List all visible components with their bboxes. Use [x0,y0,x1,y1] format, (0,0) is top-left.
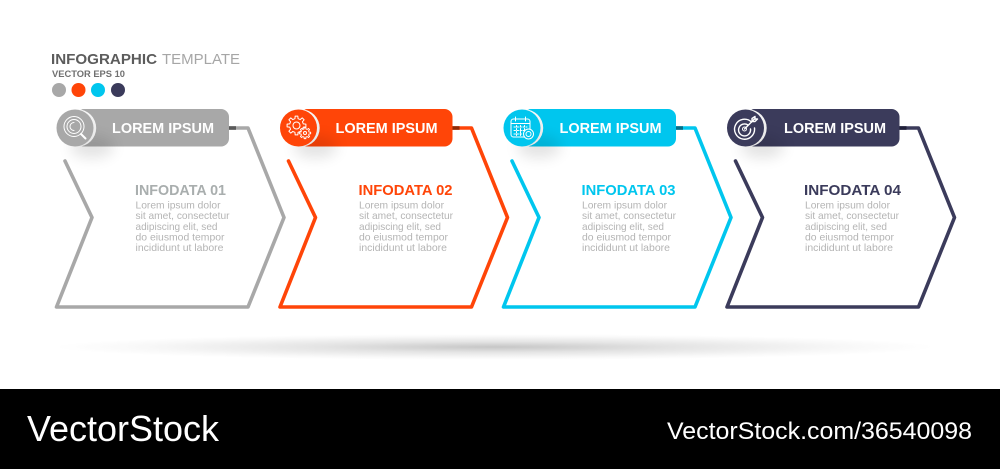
body text: do eiusmod tempor [582,232,671,244]
body text: incididunt ut labore [805,242,893,254]
step heading: INFODATA 03 [582,182,676,199]
body text [359,200,453,254]
icon shadow [740,136,784,158]
icon: target [735,116,758,139]
body text: incididunt ut labore [582,242,670,254]
pill text: LOREM IPSUM [336,121,438,137]
pill text: LOREM IPSUM [112,121,214,137]
body text: Lorem ipsum dolor [136,200,221,212]
body text: do eiusmod tempor [136,232,225,244]
icon disc [504,110,540,146]
panel: step 4 [727,109,954,307]
panel: step 3 [504,109,731,307]
icon ring [59,109,96,147]
icon ring [729,109,767,147]
body text: sit amet, consectetur [359,210,453,222]
icon shadow [294,136,338,158]
body text: incididunt ut labore [359,242,447,254]
body text: incididunt ut labore [136,242,224,254]
body text: Lorem ipsum dolor [805,200,890,212]
arrow outline [727,128,954,307]
icon disc [280,110,317,146]
subheading: VECTOR EPS 10 [52,69,125,80]
label pill [76,109,229,146]
body text: Lorem ipsum dolor [582,200,667,212]
footer band [0,389,1000,469]
body text: sit amet, consectetur [136,210,230,222]
icon disc [56,110,94,146]
label pill [746,109,900,146]
step heading: INFODATA 04 [804,182,902,199]
body text: adipiscing elit, sed [582,221,664,233]
step heading: INFODATA 02 [358,182,452,199]
colour dots [52,83,125,97]
title block [51,51,240,97]
label pill [300,109,452,146]
pill text: LOREM IPSUM [784,121,886,137]
icon shadow [70,136,114,158]
footer logo: VectorStock [27,408,220,449]
icon ring [506,109,543,147]
connector [452,126,460,130]
floor shadow [55,334,935,360]
body text: do eiusmod tempor [805,232,894,244]
icon: magnifier [64,116,86,138]
arrow outline [280,128,508,307]
body text: Lorem ipsum dolor [359,200,444,212]
panel: step 1 [56,109,284,307]
arrow outline [504,128,731,307]
body text: adipiscing elit, sed [136,221,218,233]
body text: adipiscing elit, sed [805,221,887,233]
arrow outline [56,128,284,307]
icon: gears [287,116,311,139]
pill text: LOREM IPSUM [560,121,662,137]
connector [676,126,683,130]
body text: sit amet, consectetur [805,210,899,222]
step heading: INFODATA 01 [135,182,226,199]
icon: calendar [511,117,534,139]
footer url: VectorStock.com/36540098 [667,418,972,445]
body text: sit amet, consectetur [582,210,676,222]
body text: do eiusmod tempor [359,232,448,244]
connector [229,126,236,130]
connector [900,126,906,130]
body text [582,200,676,254]
body text [805,200,899,254]
icon shadow [517,136,561,158]
icon disc [727,110,764,146]
heading: INFOGRAPHIC [51,51,157,68]
icon ring [282,109,320,147]
body text [136,200,230,254]
body text: adipiscing elit, sed [359,221,441,233]
panel: step 2 [280,109,508,307]
label pill [523,109,676,146]
heading light: TEMPLATE [162,51,240,68]
